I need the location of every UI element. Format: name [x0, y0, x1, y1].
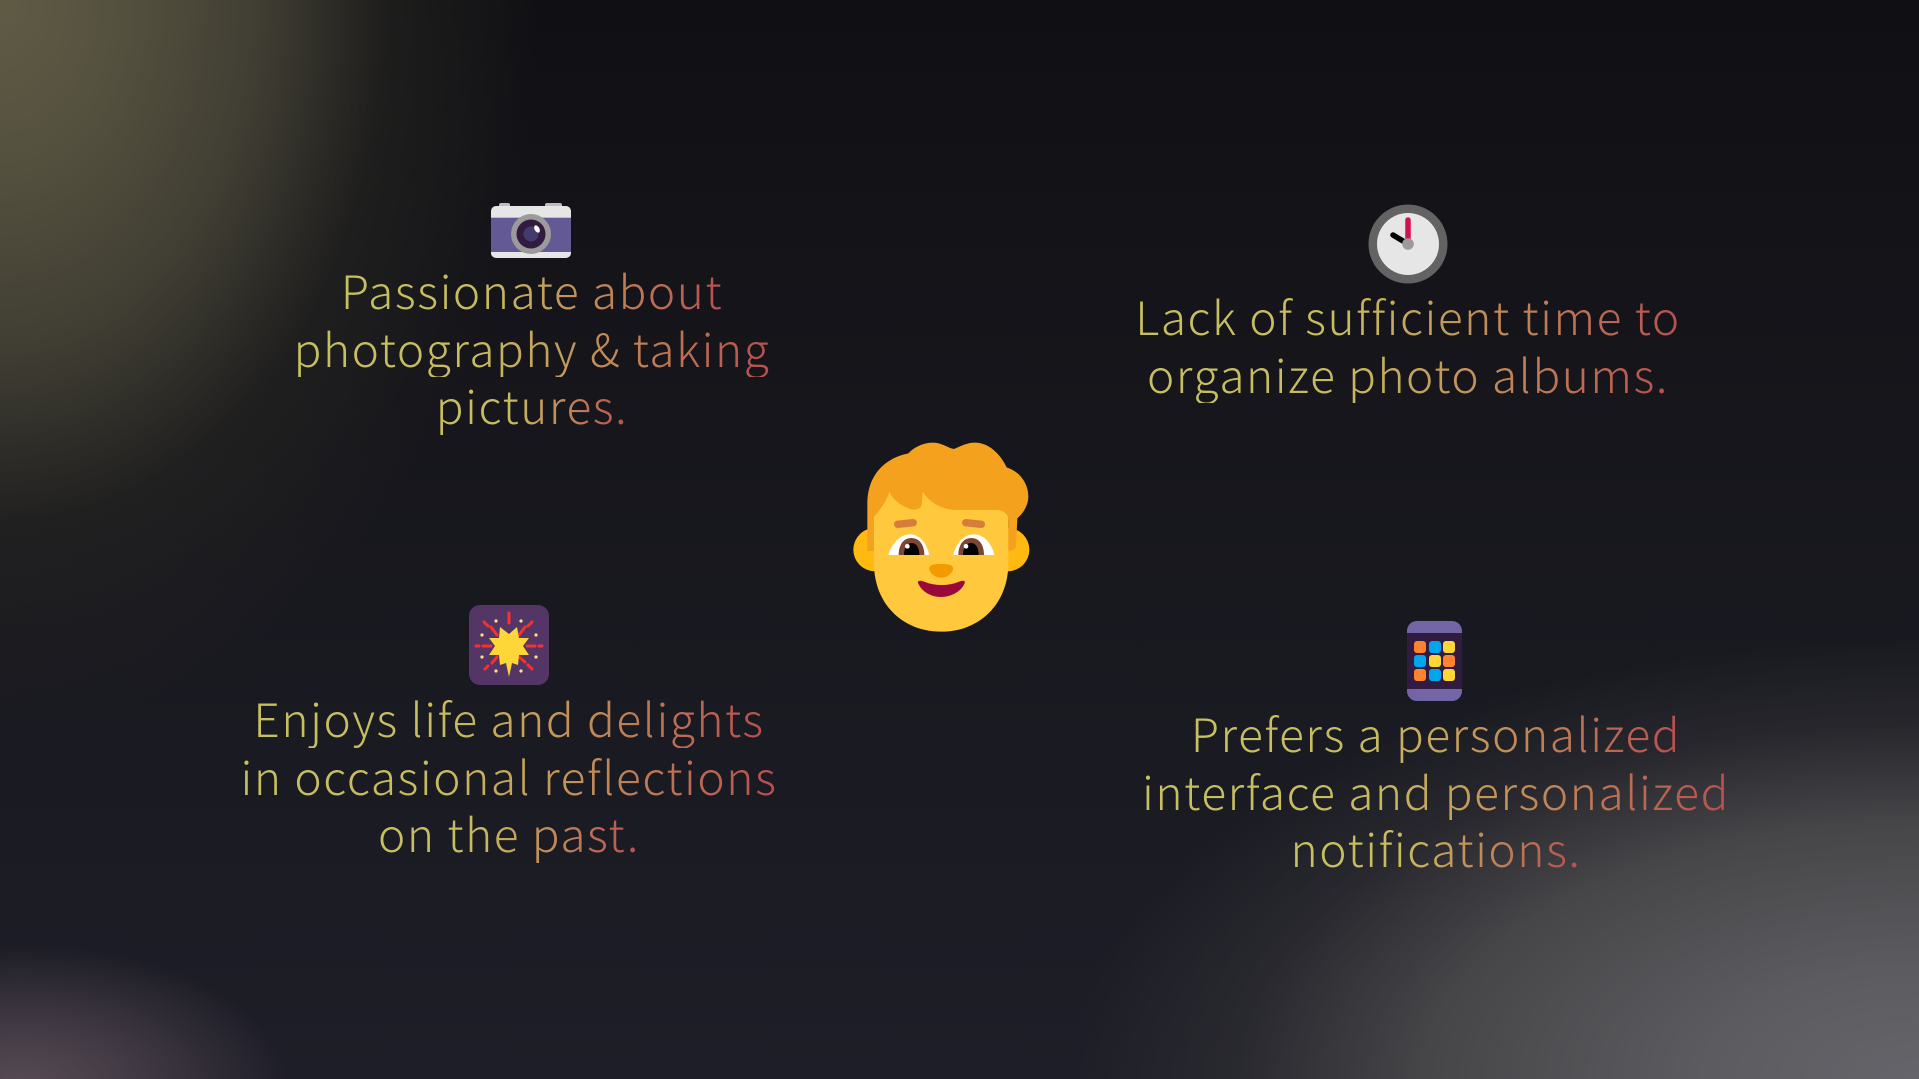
text: lack of sufficient time [1135, 283, 1681, 407]
icon: fireworks [469, 605, 549, 685]
text: prefers personalized: interface and personalized [1142, 758, 1730, 824]
text: prefers personalized: Prefers a personalized [1191, 700, 1681, 766]
text: enjoys life: Enjoys life and delights [253, 685, 765, 751]
text: passionate about photography: pictures. [436, 372, 628, 438]
text: passionate about photography: Passionate about [341, 257, 723, 323]
text: lack of sufficient time: organize photo albums. [1147, 341, 1669, 407]
text: passionate about photography: photography & taking [294, 315, 770, 381]
text: passionate about photography [294, 257, 770, 438]
text: enjoys life: on the past. [378, 800, 640, 866]
text: enjoys life: in occasional reflections [241, 743, 777, 809]
text: prefers personalized: notifications. [1290, 815, 1581, 881]
text: prefers personalized [1142, 700, 1730, 881]
text: lack of sufficient time: Lack of sufficient time to [1135, 283, 1681, 349]
icon: tablet [1407, 621, 1462, 701]
icon: camera [491, 203, 571, 258]
icon: clock [1368, 204, 1448, 284]
text: enjoys life [241, 685, 777, 866]
icon: boy face [853, 442, 1030, 632]
